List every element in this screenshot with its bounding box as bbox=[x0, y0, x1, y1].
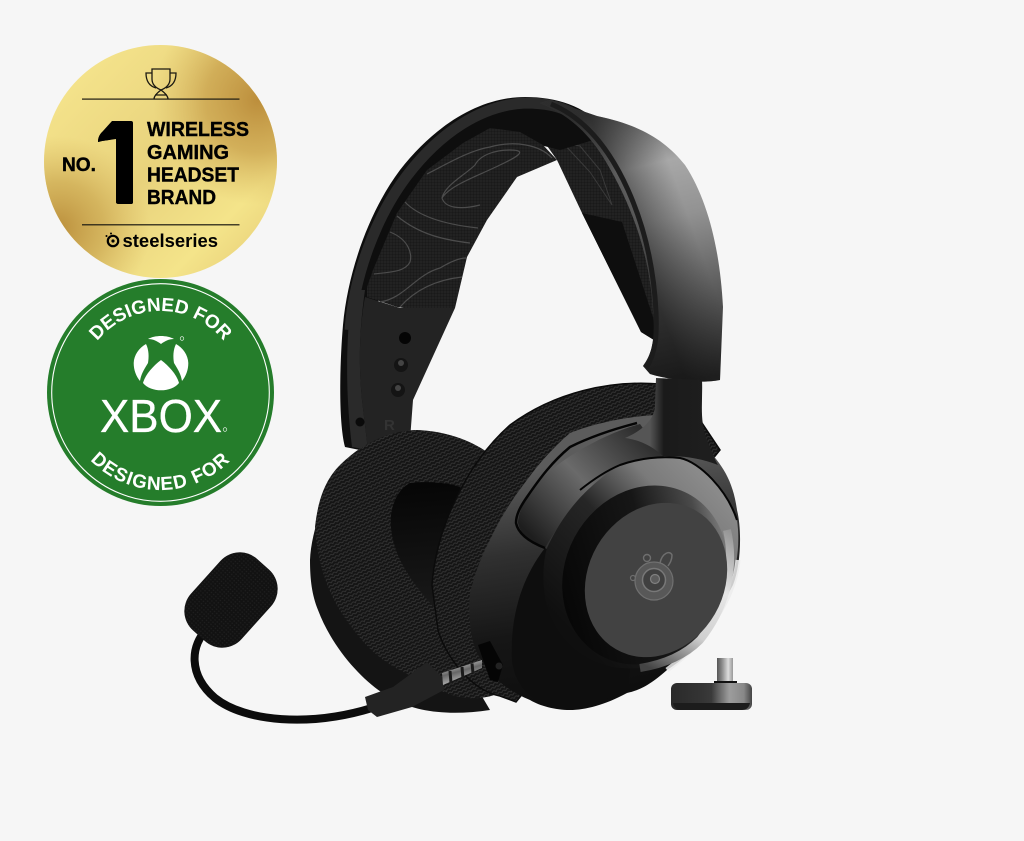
top rule bbox=[82, 98, 240, 100]
foam windscreen bbox=[174, 542, 288, 658]
lower bracket with adjustment pins bbox=[356, 297, 455, 450]
white ring bbox=[52, 284, 269, 501]
dongle lower lip bbox=[673, 703, 750, 710]
icon: steelseries cup logo bbox=[630, 553, 673, 600]
badge: designed for xbox bbox=[47, 279, 274, 506]
headband inner arc bbox=[340, 97, 610, 452]
text: wireless gaming headset brand: BRAND bbox=[147, 186, 216, 209]
text: designed for top: DESIGNED FOR bbox=[88, 298, 232, 341]
connector housing bbox=[365, 662, 444, 717]
headband outer rim bbox=[350, 103, 572, 330]
left arm edge bbox=[347, 290, 368, 450]
text: wireless gaming headset brand: HEADSET bbox=[147, 164, 239, 186]
aux port bbox=[478, 641, 503, 682]
left ear cushion bbox=[315, 430, 500, 698]
black outer ring bbox=[531, 456, 759, 694]
right edge gloss bbox=[640, 530, 730, 668]
left ear cup shell bbox=[310, 470, 490, 713]
connector collar bbox=[714, 681, 737, 685]
usb-c wireless dongle bbox=[671, 658, 752, 710]
wordmark: xbox: XBOX bbox=[100, 390, 222, 442]
lower bracket with adjustment pins: R bbox=[384, 417, 395, 434]
numeral 1: 1 bbox=[88, 98, 154, 230]
icon: xbox sphere bbox=[134, 336, 188, 390]
pad contour lines bbox=[374, 144, 552, 307]
band top seam bbox=[580, 457, 737, 520]
registered mark bbox=[223, 428, 227, 431]
text: wireless gaming headset brand: GAMING bbox=[147, 141, 229, 164]
headband fabric pad bbox=[367, 128, 557, 312]
grey disc bbox=[557, 477, 755, 683]
bottom rule bbox=[82, 224, 240, 225]
lower body crease bbox=[512, 548, 640, 707]
icon: trophy bbox=[146, 69, 176, 99]
text: wireless gaming headset brand: WIRELESS bbox=[147, 118, 249, 141]
headband outer panel bbox=[540, 100, 723, 382]
text: designed for bottom: DESIGNED FOR bbox=[91, 451, 230, 490]
right ear cushion bbox=[432, 383, 720, 702]
green disc bbox=[47, 279, 274, 506]
cup second band bbox=[543, 457, 738, 668]
right inner strap and pad bbox=[543, 128, 662, 345]
cup top wedge highlight bbox=[518, 424, 664, 548]
gold medallion bbox=[44, 45, 277, 278]
microphone bbox=[174, 542, 482, 720]
text: steelseries: steelseries bbox=[122, 230, 218, 251]
dongle body bbox=[671, 683, 752, 710]
icon: steelseries logo bbox=[106, 232, 118, 246]
jack plug bbox=[442, 660, 482, 685]
lower right silhouette gloss bbox=[667, 560, 738, 670]
text: no.: NO. bbox=[62, 155, 96, 176]
text: wireless gaming headset brand bbox=[147, 118, 249, 209]
boom arm bbox=[195, 628, 372, 720]
product: wireless headset bbox=[174, 97, 759, 720]
badge: no. 1 wireless gaming headset brand bbox=[44, 45, 277, 278]
right ear cup body bbox=[469, 415, 759, 710]
ear cup yoke stem bbox=[625, 378, 718, 465]
usb-c connector bbox=[717, 658, 733, 684]
cup seam slot bbox=[516, 423, 637, 548]
